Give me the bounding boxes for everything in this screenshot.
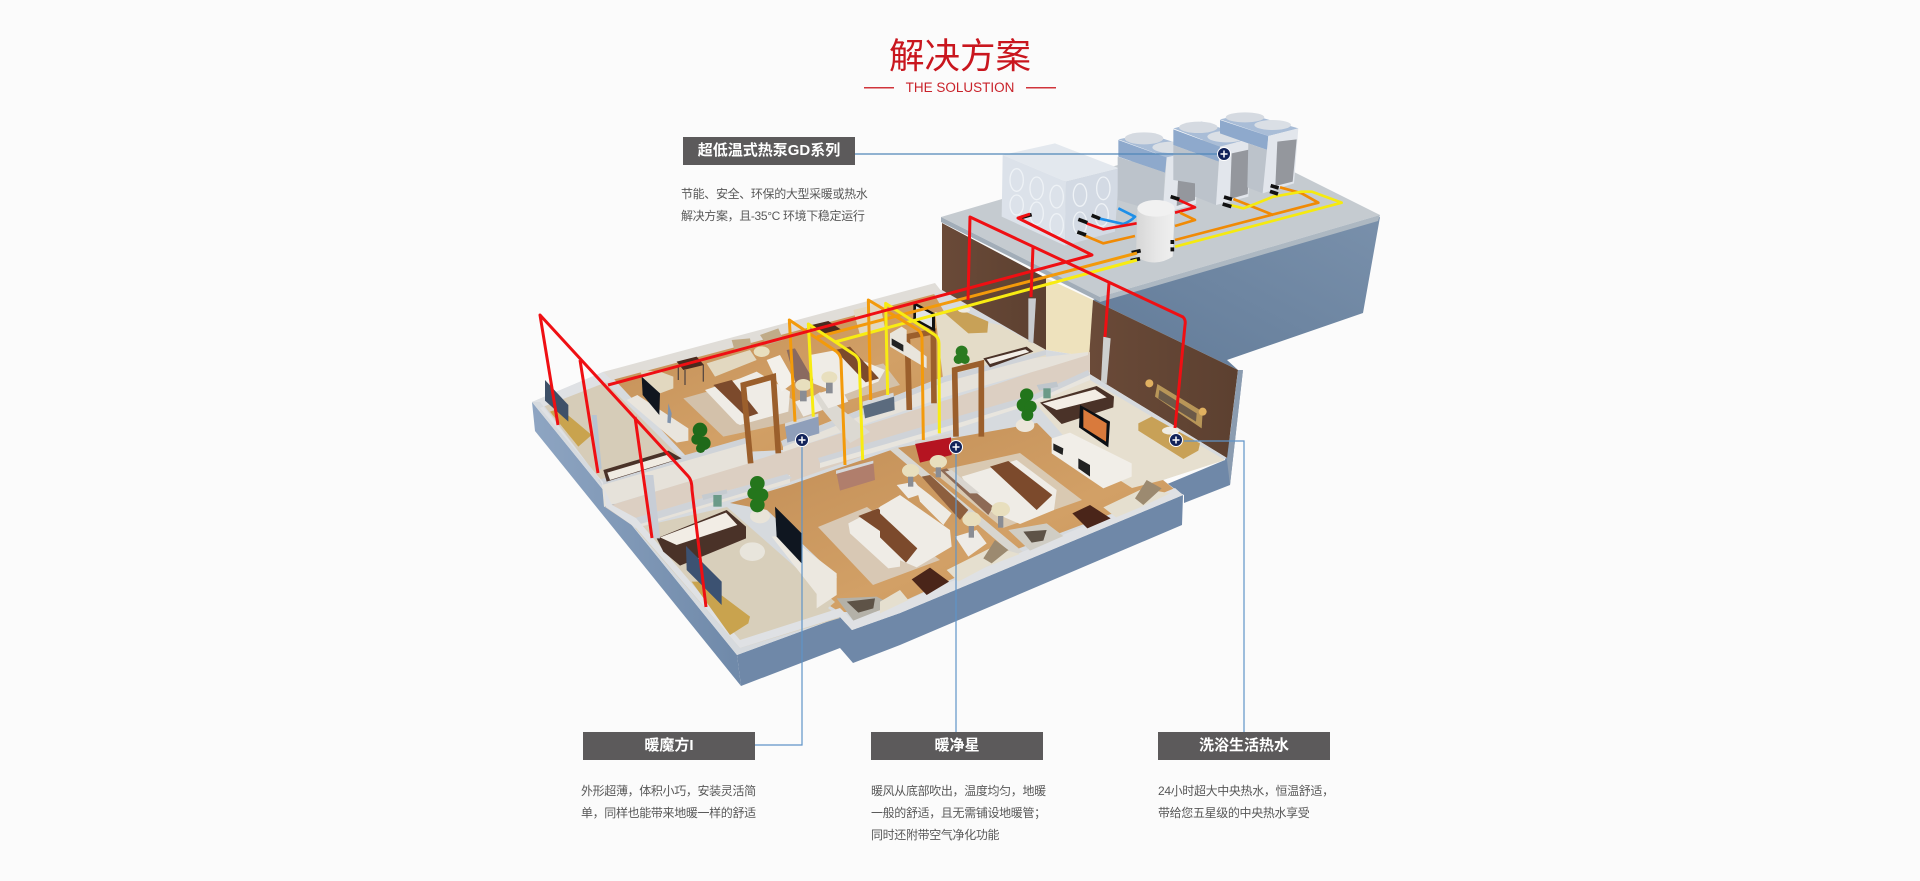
ac blue <box>785 416 819 443</box>
water tank <box>1002 143 1119 246</box>
orange and yellow risers <box>789 300 939 465</box>
marker: right shower <box>1170 434 1182 446</box>
text: cube: 单，同样也能带来地暖一样的舒适 <box>581 806 756 820</box>
headboard right <box>940 468 993 515</box>
door 2 <box>907 332 934 410</box>
bed 2 <box>810 350 885 395</box>
text: GD series <box>681 187 868 223</box>
red pipes <box>540 214 1185 607</box>
counter <box>1138 417 1200 459</box>
toilet <box>740 542 765 561</box>
tv stand <box>1052 433 1132 488</box>
bed lower <box>848 497 900 568</box>
label: cube <box>583 732 755 760</box>
heat pump 3 <box>1220 112 1298 193</box>
upper room furniture <box>640 302 981 463</box>
marker: heat pump <box>1218 148 1230 160</box>
back wall strip <box>603 283 942 380</box>
room floors <box>532 283 1225 648</box>
roof side face <box>1093 217 1380 370</box>
heat pump 1 <box>1118 132 1198 213</box>
pillows <box>787 348 813 387</box>
connector: bottom right <box>1184 441 1244 732</box>
cream back wall <box>1046 278 1093 357</box>
tub 1 <box>603 451 682 482</box>
bath 2 tub <box>657 510 746 566</box>
text: star <box>871 784 1046 842</box>
title rule left <box>864 87 894 88</box>
wall lower corridor <box>636 475 790 528</box>
building left slab face <box>532 402 741 686</box>
text: GD series: 节能、安全、环保的大型采暖或热水 <box>681 187 867 201</box>
door 3 <box>955 363 981 437</box>
cylinder tank <box>1136 200 1175 262</box>
connector: bottom middle <box>955 452 957 732</box>
title rule right <box>1026 87 1056 88</box>
ac pink <box>836 461 875 491</box>
plant 2 <box>750 509 770 523</box>
base floor outline <box>532 290 1227 655</box>
rug lower left <box>818 507 940 585</box>
right shower <box>1101 337 1111 384</box>
shower 1 <box>592 415 602 472</box>
west room furniture <box>545 377 900 635</box>
roof equipment <box>1002 112 1342 262</box>
east room furniture <box>880 298 1207 613</box>
text: GD series: 解决方案，且-35°C 环境下稳定运行 <box>681 209 864 223</box>
roof block and building shell <box>532 135 1380 686</box>
tv 1 <box>627 395 688 443</box>
rug <box>683 377 817 437</box>
label: hot water <box>1158 732 1330 760</box>
text: cube: 外形超薄，体积小巧，安装灵活简 <box>581 784 756 798</box>
door 1 <box>743 377 778 463</box>
lower bedroom wood floor <box>730 423 1175 612</box>
text: star: 同时还附带空气净化功能 <box>871 828 999 842</box>
headboard left <box>922 475 968 520</box>
lamps <box>795 395 823 417</box>
text: cube <box>581 784 756 820</box>
label: hot water: 洗浴生活热水 <box>1199 737 1289 754</box>
main orange pipe <box>817 253 1137 337</box>
wall lower corridor east <box>820 372 1090 468</box>
plant <box>1016 419 1034 432</box>
subtitle: THE SOLUSTION <box>906 80 1014 95</box>
far tub <box>983 347 1033 367</box>
far tv <box>913 302 935 332</box>
label: GD series: 超低温式热泵GD系列 <box>698 142 840 159</box>
sofa corner <box>837 597 893 621</box>
towel rack <box>1037 382 1058 391</box>
roof slab <box>941 135 1380 297</box>
bath 2 floor <box>635 507 840 648</box>
roof pipes <box>1083 187 1342 247</box>
bath 1 mirror and counter <box>550 408 592 447</box>
text: star: 一般的舒适，且无需铺设地暖管； <box>871 806 1046 820</box>
corridor <box>605 352 1090 528</box>
room pipes <box>540 214 1185 607</box>
far bath floor <box>935 312 1046 395</box>
side table <box>677 357 704 370</box>
sofas <box>1103 488 1170 517</box>
text: star: 暖风从底部吹出，温度均匀，地暖 <box>871 784 1046 798</box>
right tub <box>1040 386 1114 424</box>
wall upper corridor east <box>783 352 1088 452</box>
text: hot water: 24小时超大中央热水，恒温舒适， <box>1158 784 1334 798</box>
building front slab face <box>737 495 1183 686</box>
heat pump 2 <box>1173 122 1252 205</box>
text: hot water: 带给您五星级的中央热水享受 <box>1158 806 1309 820</box>
bedroom divider <box>890 447 1023 557</box>
text: hot water <box>1158 784 1334 820</box>
title: 解决方案 <box>889 36 1031 76</box>
brown back wall near <box>1088 300 1238 458</box>
bed right <box>962 460 1057 524</box>
bed 1 <box>705 372 790 425</box>
mirror <box>1155 384 1203 428</box>
towel rack <box>702 489 727 500</box>
tv <box>1079 405 1110 447</box>
wall between bath1 and corridor <box>602 442 750 507</box>
stand <box>890 327 927 368</box>
connector: top <box>854 153 1218 155</box>
far plant <box>954 346 970 364</box>
label: cube: 暖魔方I <box>644 737 694 754</box>
tv 2 and stand <box>772 535 837 608</box>
brown back wall far <box>942 223 1046 350</box>
sofas far <box>707 350 757 377</box>
counter 2 and mirror <box>692 582 750 635</box>
upper divider <box>812 392 870 443</box>
far counter <box>945 309 988 333</box>
ac dark <box>863 395 895 418</box>
far shower <box>1028 298 1036 343</box>
rug lower right <box>933 453 1082 528</box>
main yellow pipe <box>835 260 1137 342</box>
east bath floor <box>1035 380 1225 488</box>
label: star <box>871 732 1043 760</box>
bed left <box>880 495 952 567</box>
bath 1 floor <box>540 380 680 480</box>
black connectors <box>1022 186 1279 261</box>
lamps and nightstands <box>897 482 923 498</box>
plant 1 <box>691 423 711 453</box>
bath left front wall <box>532 372 1183 648</box>
red ac <box>915 437 952 463</box>
label: GD series <box>683 137 855 165</box>
marker: middle unit <box>950 440 962 454</box>
side tables <box>1072 505 1111 528</box>
label: star: 暖净星 <box>934 737 980 754</box>
upper bedrooms wood floor <box>612 292 960 455</box>
marker: left unit <box>796 434 808 446</box>
connector: bottom left <box>755 446 802 745</box>
shower 2 <box>645 475 660 538</box>
